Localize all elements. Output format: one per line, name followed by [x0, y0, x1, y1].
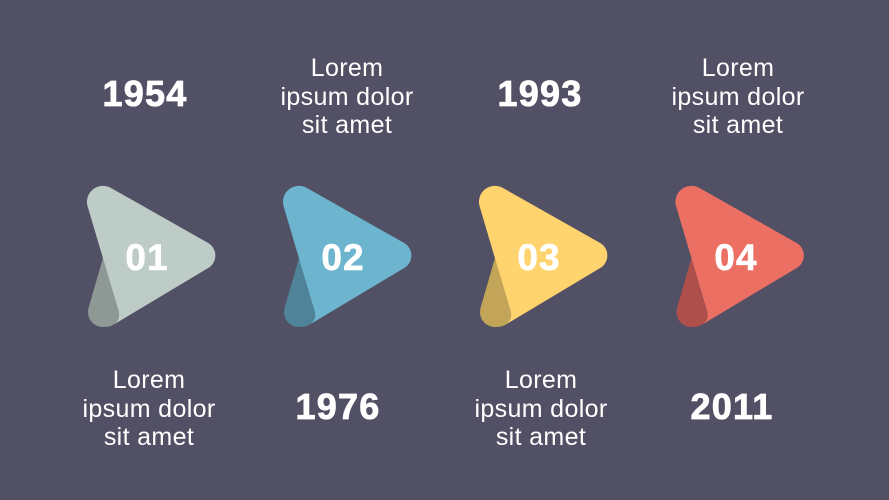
text block: top 4: Lorem — [702, 54, 774, 82]
text block: top 2: sit amet — [302, 111, 392, 139]
text block: bottom 3: sit amet — [496, 423, 586, 451]
year: 1993: 1993 — [498, 73, 582, 114]
arrow 01 — [87, 186, 215, 327]
text block: bottom 3: ipsum dolor — [474, 394, 608, 422]
text block: top 4: ipsum dolor — [671, 82, 805, 110]
text block: top 2: ipsum dolor — [280, 82, 414, 110]
text block: bottom 3: Lorem — [505, 366, 577, 394]
text block: top 2 — [280, 54, 414, 139]
text block: top 4: sit amet — [693, 111, 783, 139]
arrow 04: 04 — [714, 237, 758, 278]
text block: top 4 — [671, 54, 805, 139]
text block: bottom 1: Lorem — [113, 366, 185, 394]
arrow 04 — [675, 186, 804, 327]
year: 1976: 1976 — [296, 386, 380, 427]
arrow 02: 02 — [321, 237, 365, 278]
text block: bottom 1: sit amet — [104, 423, 194, 451]
arrow 03 — [479, 186, 607, 327]
text block: top 2: Lorem — [311, 54, 383, 82]
text block: bottom 1 — [82, 366, 216, 451]
year: 2011: 2011 — [691, 386, 773, 427]
text block: bottom 1: ipsum dolor — [82, 394, 216, 422]
arrow 03: 03 — [517, 237, 561, 278]
arrow 01: 01 — [125, 237, 169, 278]
text block: bottom 3 — [474, 366, 608, 451]
year: 1954: 1954 — [103, 73, 187, 114]
arrow 02 — [283, 186, 411, 327]
